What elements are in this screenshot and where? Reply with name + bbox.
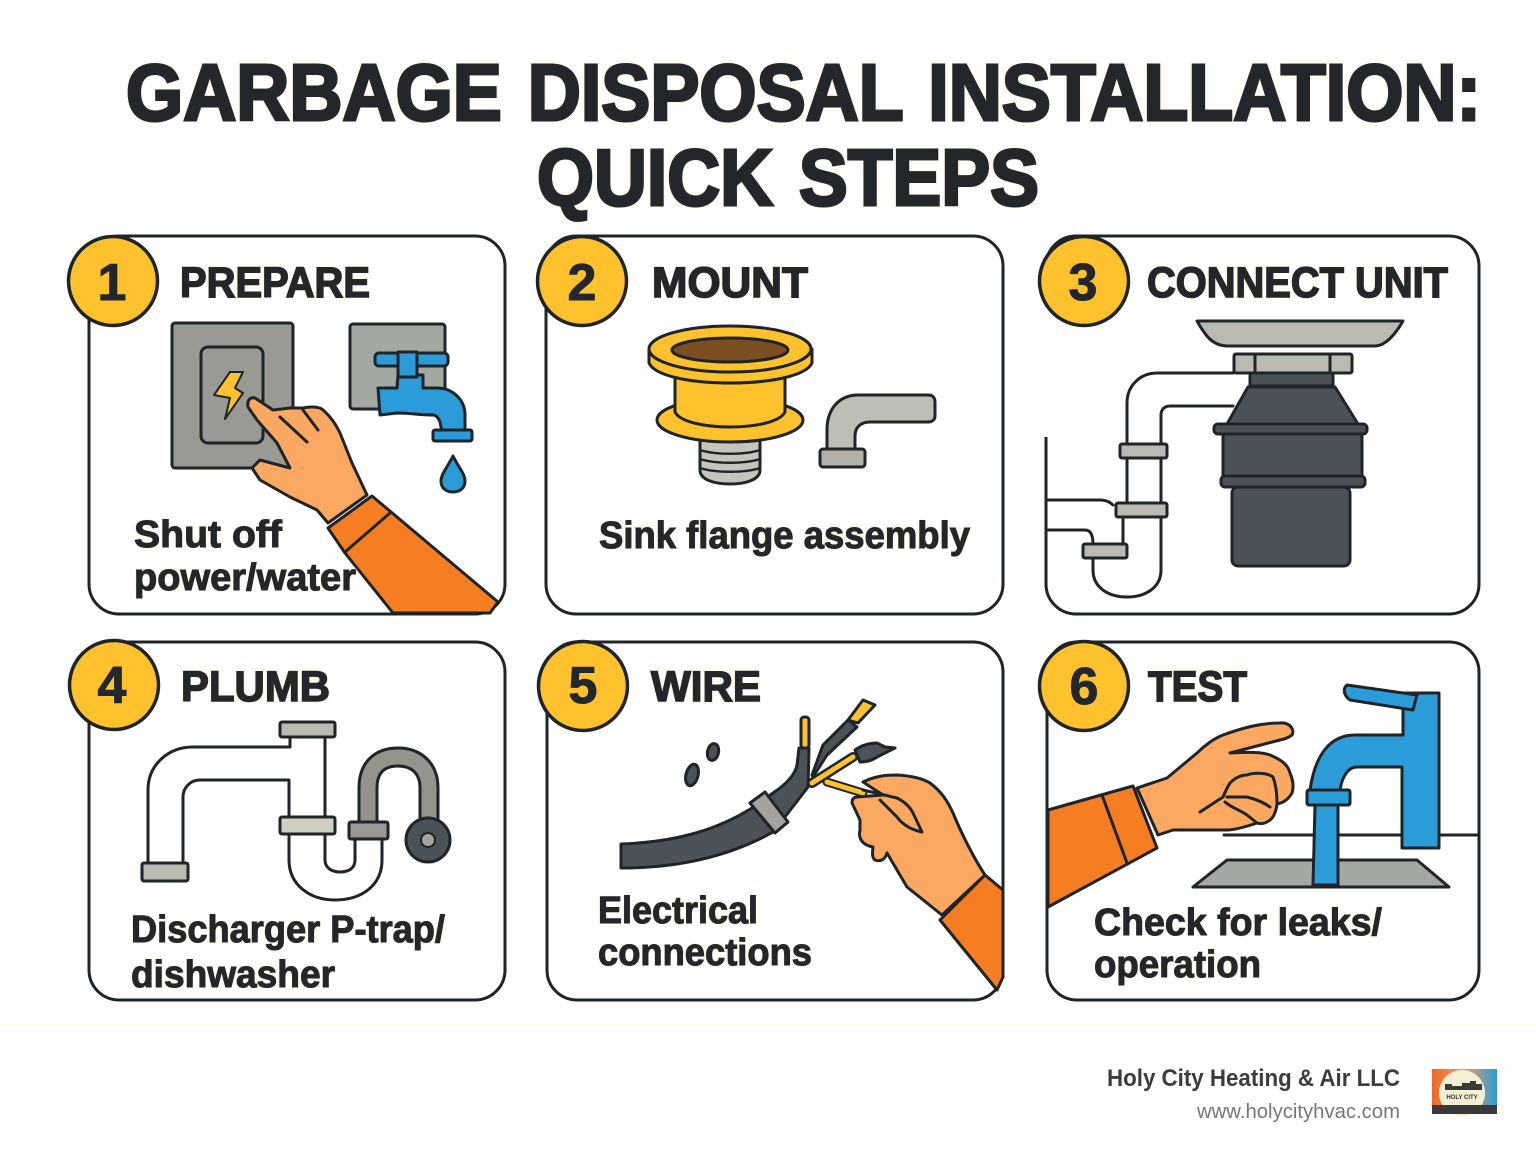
number badge 3 bbox=[1040, 236, 1128, 326]
number badge 3: 3 bbox=[1069, 254, 1097, 312]
number badge 2 bbox=[538, 236, 626, 326]
panel: step 6 test bbox=[1040, 642, 1479, 1000]
heading: plumb: PLUMB bbox=[181, 663, 330, 711]
number badge 6: 6 bbox=[1070, 658, 1098, 716]
caption: shut off power/water: power/water bbox=[134, 557, 356, 599]
footer logo: HOLY CITY bbox=[1446, 1095, 1478, 1101]
card outline bbox=[89, 642, 505, 1000]
icon: gray dishwasher hose bbox=[349, 757, 450, 862]
icon: sink flange assembly bbox=[649, 326, 812, 484]
number badge 5 bbox=[538, 642, 628, 730]
icon: hand pressing switch bbox=[248, 398, 498, 613]
number badge 4 bbox=[70, 640, 158, 730]
caption: electrical connections: Electrical bbox=[598, 890, 758, 932]
icon: p-trap pipes bbox=[142, 722, 382, 900]
caption: check for leaks/operation: Check for leaks/ bbox=[1094, 902, 1382, 944]
caption: discharge p-trap/dishwasher: Discharger P-trap/ bbox=[131, 909, 445, 951]
number badge 2: 2 bbox=[568, 254, 596, 312]
number badge 6 bbox=[1040, 642, 1128, 730]
panel: step 4 plumb bbox=[70, 640, 505, 1000]
panel: step 1 prepare bbox=[68, 236, 505, 614]
footer brand text: Holy City Heating & Air LLC bbox=[1107, 1065, 1400, 1092]
card outline bbox=[1046, 236, 1479, 614]
card outline bbox=[546, 236, 1003, 614]
icon: drain pipes bbox=[1048, 373, 1233, 597]
icon: electrical switch plate bbox=[172, 323, 293, 468]
footer logo bbox=[1432, 1069, 1497, 1116]
caption: discharge p-trap/dishwasher: dishwasher bbox=[131, 954, 335, 996]
caption: shut off power/water bbox=[134, 514, 356, 599]
footer brand text bbox=[1107, 1065, 1400, 1123]
heading: wire: WIRE bbox=[651, 663, 761, 711]
heading: prepare: PREPARE bbox=[180, 259, 370, 307]
caption: shut off power/water: Shut off bbox=[134, 514, 282, 556]
icon: hand pointing at faucet bbox=[1048, 723, 1293, 907]
gap in left border bbox=[1043, 295, 1049, 437]
caption: check for leaks/operation: operation bbox=[1094, 944, 1261, 986]
card outline bbox=[1047, 642, 1479, 1000]
heading: mount: MOUNT bbox=[652, 259, 808, 307]
title bbox=[126, 48, 1481, 222]
panel: step 3 connect unit bbox=[1040, 236, 1479, 614]
title: QUICK STEPS bbox=[537, 133, 1039, 222]
footer brand text: www.holycityhvac.com bbox=[1196, 1101, 1400, 1123]
card outline bbox=[89, 236, 505, 614]
number badge 1: 1 bbox=[98, 254, 126, 312]
icon: hand holding wire bbox=[852, 775, 1003, 990]
icon: electrical cable with stripped wires bbox=[621, 700, 895, 868]
number badge 1 bbox=[68, 236, 158, 326]
icon: blue faucet with running water bbox=[1307, 685, 1439, 885]
caption: check for leaks/operation bbox=[1094, 902, 1382, 986]
caption: electrical connections: connections bbox=[598, 932, 812, 974]
panel: step 5 wire bbox=[538, 642, 1003, 1000]
number badge 4: 4 bbox=[98, 657, 127, 715]
icon: water faucet with drop bbox=[350, 324, 472, 492]
caption: discharge p-trap/dishwasher bbox=[131, 909, 445, 996]
panel: step 2 mount bbox=[538, 236, 1003, 614]
icon: gray elbow pipe bbox=[820, 395, 935, 467]
heading: test: TEST bbox=[1148, 663, 1247, 711]
caption: electrical connections bbox=[598, 890, 812, 974]
icon: wire scraps bbox=[683, 743, 720, 787]
counter line bbox=[1224, 834, 1478, 836]
card outline bbox=[547, 642, 1003, 1000]
icon: sink basin bbox=[1193, 860, 1449, 887]
caption: sink flange assembly: Sink flange assembly bbox=[599, 515, 970, 557]
icon: disposal unit bbox=[1197, 321, 1403, 566]
number badge 5: 5 bbox=[569, 657, 597, 715]
heading: connect unit: CONNECT UNIT bbox=[1147, 259, 1448, 307]
